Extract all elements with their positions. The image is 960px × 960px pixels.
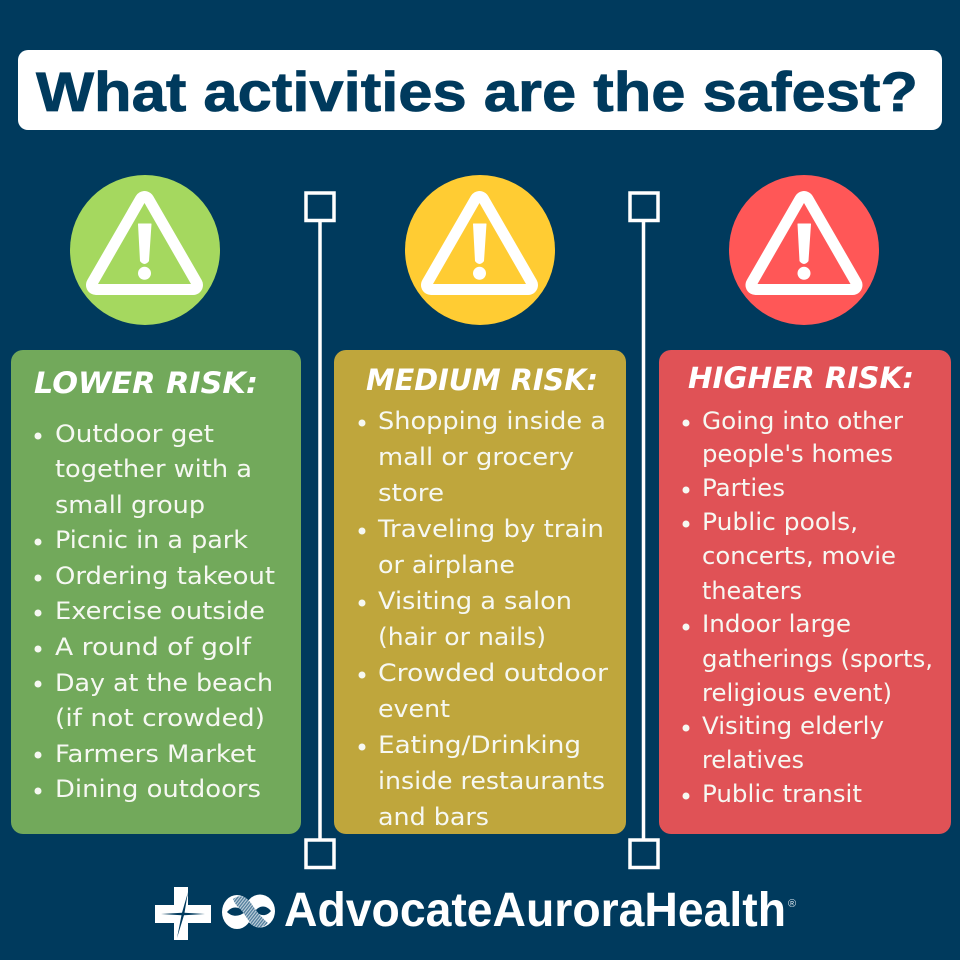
list: lower risk activities	[34, 420, 275, 803]
list: medium risk activities: inside restaurants	[378, 767, 605, 795]
list: medium risk activities: Traveling by train	[377, 515, 604, 543]
list: medium risk activities: mall or grocery	[378, 443, 574, 471]
list: medium risk activities: or airplane	[378, 551, 515, 579]
list: lower risk activities: small group	[55, 491, 205, 519]
list: lower risk activities: Farmers Market	[55, 740, 256, 768]
list: higher risk activities	[682, 407, 933, 808]
list: lower risk activities: A round of golf	[55, 633, 252, 661]
list: higher risk activities: Indoor large	[702, 610, 851, 638]
list: higher risk activities: theaters	[702, 577, 802, 605]
list: higher risk activities: gatherings (sports,	[702, 645, 933, 673]
registered mark: ®	[788, 898, 796, 910]
list: lower risk activities: Picnic in a park	[55, 526, 248, 554]
list: higher risk activities: people's homes	[702, 440, 893, 468]
list: medium risk activities: Crowded outdoor	[378, 659, 608, 687]
list: higher risk activities: Parties	[702, 474, 785, 502]
list: medium risk activities	[358, 407, 608, 831]
logo: Advocate Aurora Health	[155, 884, 796, 940]
list: medium risk activities: and bars	[378, 803, 489, 831]
list: higher risk activities: Public pools,	[702, 508, 858, 536]
list: lower risk activities: (if not crowded)	[55, 704, 265, 732]
heading: lower risk: LOWER RISK:	[34, 366, 258, 400]
icon: cross	[155, 887, 211, 940]
list: lower risk activities: Day at the beach	[55, 669, 273, 697]
list: medium risk activities: event	[378, 695, 450, 723]
title banner: What activities are the safest?	[36, 60, 918, 123]
list: higher risk activities: Public transit	[702, 780, 862, 808]
divider: right	[630, 193, 658, 868]
list: medium risk activities: (hair or nails)	[378, 623, 546, 651]
list: lower risk activities: Ordering takeout	[55, 562, 275, 590]
list: medium risk activities: Visiting a salon	[378, 587, 572, 615]
list: higher risk activities: religious event)	[702, 679, 892, 707]
list: medium risk activities: Eating/Drinking	[378, 731, 581, 759]
list: lower risk activities: together with a	[55, 455, 252, 483]
icon: red warning	[729, 175, 879, 325]
icon: infinity mark	[222, 894, 275, 929]
list: higher risk activities: Going into other	[702, 407, 903, 435]
panel: higher risk	[659, 350, 951, 834]
icon: yellow warning	[405, 175, 555, 325]
list: medium risk activities: Shopping inside a	[378, 407, 606, 435]
list: lower risk activities: Outdoor get	[55, 420, 214, 448]
divider: left	[306, 193, 334, 868]
panel: medium risk	[334, 350, 626, 834]
list: higher risk activities: relatives	[702, 746, 804, 774]
list: higher risk activities: concerts, movie	[702, 542, 896, 570]
panel: lower risk	[11, 350, 301, 834]
list: medium risk activities: store	[378, 479, 444, 507]
wordmark: AdvocateAuroraHealth	[284, 884, 786, 937]
list: lower risk activities: Exercise outside	[55, 597, 265, 625]
list: higher risk activities: Visiting elderly	[702, 712, 884, 740]
icon: green warning	[70, 175, 220, 325]
heading: medium risk: MEDIUM RISK:	[366, 363, 598, 397]
heading: higher risk: HIGHER RISK:	[688, 361, 914, 395]
title banner	[18, 50, 942, 130]
list: lower risk activities: Dining outdoors	[55, 775, 261, 803]
